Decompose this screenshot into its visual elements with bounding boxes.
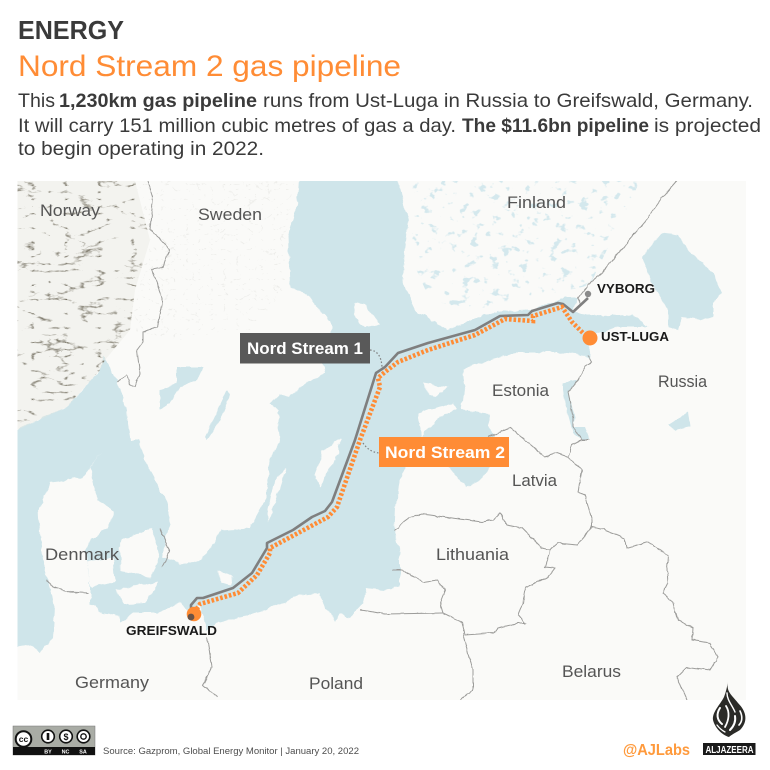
city labels bbox=[126, 281, 670, 638]
text block: introduction: It will carry 151 million cubic metres of gas a day. bbox=[18, 115, 456, 137]
country labels: Denmark bbox=[45, 546, 120, 564]
country labels: Finland bbox=[507, 194, 566, 212]
licence badge: $ bbox=[63, 732, 69, 742]
callout: Nord Stream 1 bbox=[240, 333, 370, 364]
country labels: Poland bbox=[309, 675, 363, 693]
land masses bbox=[0, 170, 770, 710]
terrain: Sweden relief bbox=[135, 181, 292, 337]
country labels: Latvia bbox=[512, 472, 558, 490]
logo: Al Jazeera bbox=[703, 682, 756, 756]
panel: map bbox=[18, 181, 722, 700]
licence badge bbox=[13, 726, 95, 756]
pipeline: Nord Stream 2 bbox=[194, 307, 590, 613]
leader line: Nord Stream 1 bbox=[370, 350, 382, 367]
licence badge: cc bbox=[19, 734, 28, 744]
text block: introduction: The $11.6bn pipeline bbox=[462, 115, 649, 137]
city labels: GREIFSWALD bbox=[126, 623, 217, 638]
text block: introduction bbox=[18, 90, 761, 160]
text block: introduction: This bbox=[18, 90, 55, 112]
wordmark: ALJAZEERA bbox=[706, 745, 754, 756]
country labels: Russia bbox=[658, 373, 708, 391]
callout: Nord Stream 2: Nord Stream 2 bbox=[385, 443, 505, 462]
callout: Nord Stream 2 bbox=[379, 437, 509, 467]
country labels: Sweden bbox=[198, 206, 262, 224]
marker: Ust-Luga bbox=[582, 330, 598, 346]
city labels: UST-LUGA bbox=[601, 329, 670, 344]
country labels: Germany bbox=[75, 674, 150, 692]
country labels: Belarus bbox=[562, 663, 621, 681]
country labels: Lithuania bbox=[436, 546, 510, 564]
source line: Source: Gazprom, Global Energy Monitor | January 20, 2022 bbox=[103, 746, 359, 757]
marker: Vyborg bbox=[585, 291, 591, 297]
licence badge: SA bbox=[79, 750, 87, 756]
social handle: @AJLabs bbox=[623, 742, 690, 759]
licence badge: BY bbox=[44, 750, 52, 756]
sea bbox=[18, 181, 648, 653]
text block: introduction: 1,230km gas pipeline bbox=[59, 90, 257, 112]
country labels bbox=[40, 194, 708, 693]
text block: introduction: to begin operating in 2022. bbox=[18, 138, 264, 160]
country labels: Norway bbox=[40, 202, 101, 220]
pipeline: Nord Stream 1 bbox=[191, 298, 588, 617]
heading: section label: ENERGY bbox=[18, 15, 124, 45]
inland lakes bbox=[160, 233, 722, 622]
terrain: Norway relief bbox=[18, 181, 148, 422]
callout: Nord Stream 1: Nord Stream 1 bbox=[247, 339, 363, 358]
country borders bbox=[47, 181, 718, 700]
terrain: Norway tint bbox=[18, 181, 150, 430]
country labels: Estonia bbox=[492, 382, 550, 400]
city labels: VYBORG bbox=[597, 281, 655, 296]
text block: introduction: is projected bbox=[654, 115, 761, 137]
title: Nord Stream 2 gas pipeline bbox=[18, 50, 401, 83]
marker: Greifswald bbox=[187, 607, 201, 621]
text block: introduction: runs from Ust-Luga in Russia to Greifswald, Germany. bbox=[263, 90, 753, 112]
licence badge: NC bbox=[62, 750, 69, 756]
icon: calligraphic flame bbox=[713, 682, 745, 737]
Finnish lakes bbox=[412, 181, 638, 308]
leader line: Nord Stream 2 bbox=[363, 443, 379, 453]
